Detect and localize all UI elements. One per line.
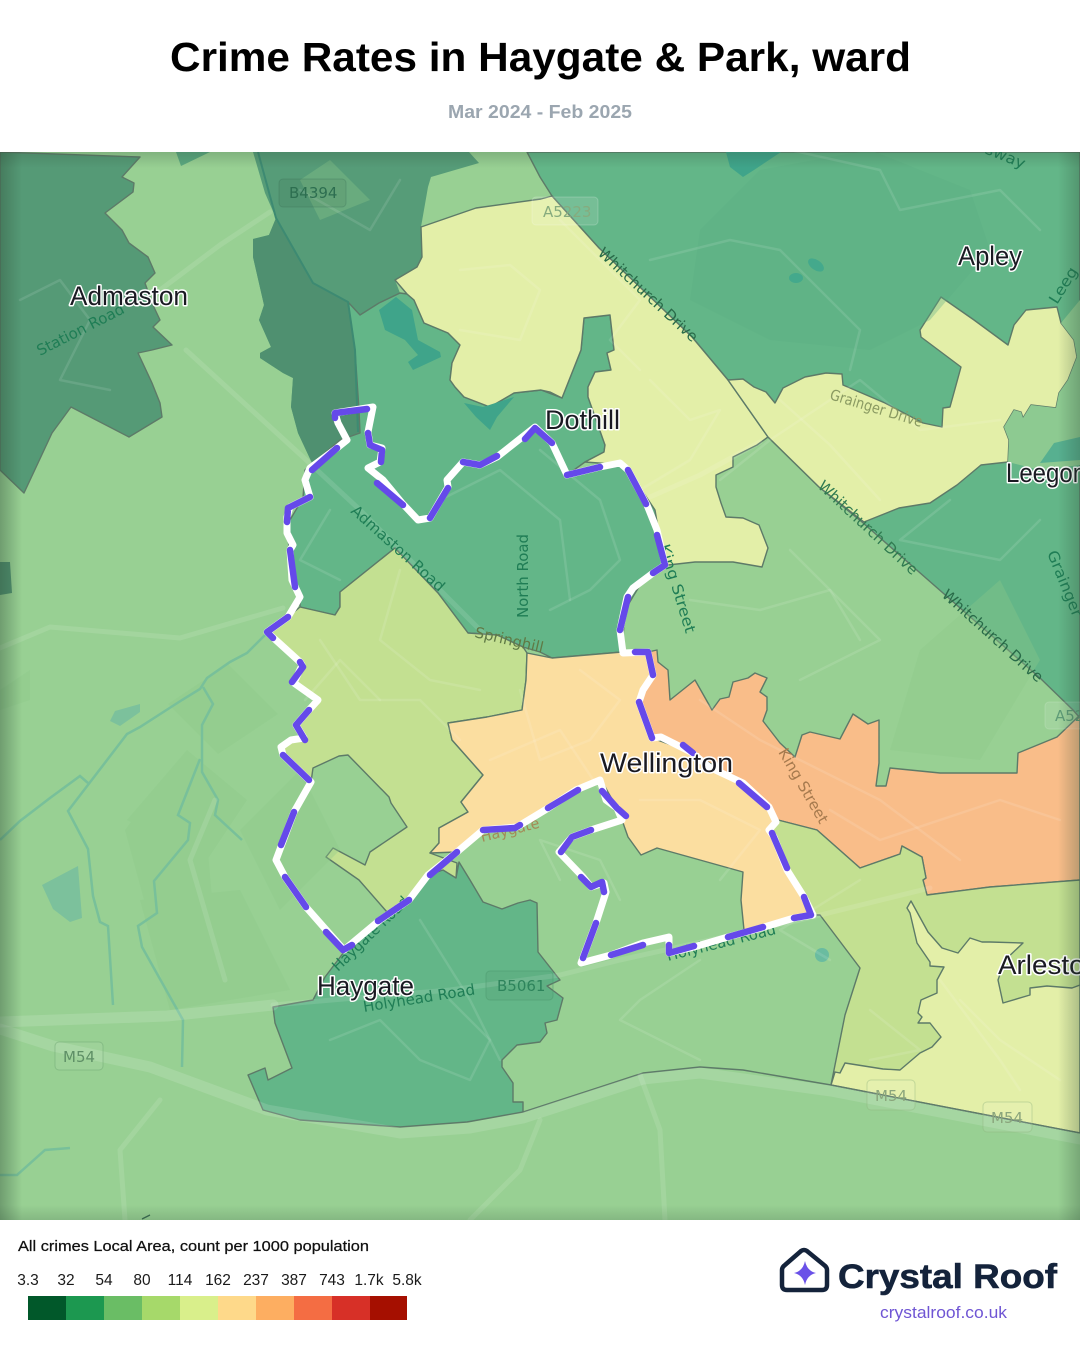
road labels: Haygate [479, 814, 541, 846]
road labels: Whitchurch Drive [938, 586, 1047, 686]
road shields: A5223 [543, 203, 591, 221]
road labels: Whitchurch Drive [814, 477, 922, 579]
road shields: M54 [875, 1087, 907, 1105]
logo: Crystal Roof house icon [782, 1250, 827, 1290]
legend scale labels: 237 [243, 1272, 269, 1289]
road labels: King Street [655, 542, 699, 635]
legend scale labels: 5.8k [392, 1272, 422, 1289]
road shields: B4394 [289, 184, 337, 202]
region: lime west of Wellington [267, 548, 527, 912]
region: dark woodland north [253, 152, 479, 463]
region: Leegomery east light green [1004, 300, 1080, 470]
legend title: All crimes Local Area, count per 1000 population [18, 1238, 369, 1255]
road labels: Leeg [1045, 264, 1080, 307]
region: Wellington east orange [639, 650, 1080, 895]
road labels [34, 140, 1080, 1016]
legend scale labels: 54 [95, 1272, 113, 1289]
place labels [70, 241, 1080, 1001]
region: Dothill mid green [287, 293, 665, 658]
M54 boundary line [523, 1067, 1080, 1133]
road labels: Whitchurch Drive [594, 244, 702, 346]
road shields: B5061 [497, 977, 545, 995]
water and terrain details [0, 150, 1080, 1219]
place labels: Apley [958, 241, 1022, 271]
region: Dothill north yellow-green [395, 196, 768, 567]
road shields [55, 179, 1080, 1132]
title: Crime Rates in Haygate & Park, ward [170, 34, 911, 80]
subtitle: date range: Mar 2024 - Feb 2025 [448, 102, 632, 122]
road labels: Holyhead Road [362, 980, 476, 1016]
region: Grainger yellow-green [728, 297, 1077, 522]
legend colour bar [28, 1296, 407, 1320]
legend scale labels: 114 [168, 1272, 193, 1289]
ward boundary: Haygate and Park [267, 407, 813, 963]
road labels: North Road [514, 534, 532, 618]
legend scale labels: 162 [205, 1272, 231, 1289]
road labels: Springhill [473, 623, 545, 657]
region: small dark patch left edge [0, 562, 12, 595]
road labels: Admaston Road [347, 502, 449, 595]
region: Arleston yellow-green [831, 901, 1080, 1133]
legend scale labels: 743 [319, 1272, 345, 1289]
legend scale labels: 3.3 [17, 1272, 39, 1289]
region: lime south east [769, 820, 1080, 1133]
road labels: Holyhead Road [665, 920, 778, 965]
road shields: M54 [63, 1048, 95, 1066]
legend scale labels: 387 [281, 1272, 307, 1289]
place labels: Haygate [317, 971, 414, 1001]
region: small dark patch top [176, 152, 210, 166]
region: Wellington town cream [430, 652, 813, 930]
road labels: Station Road [34, 300, 127, 360]
website url: crystalroof.co.uk [880, 1304, 1008, 1322]
region: Haygate south mid green [248, 862, 563, 1127]
region: darkest woodland strip [253, 218, 360, 463]
road labels: Grainger Drive [828, 386, 925, 431]
road shields: M54 [991, 1109, 1023, 1127]
map edge vignette [0, 152, 1080, 1220]
legend scale labels [17, 1272, 422, 1289]
region: Admaston dark green [0, 152, 172, 493]
choropleth map [0, 140, 1080, 1220]
legend scale labels: 32 [57, 1272, 75, 1289]
road network [0, 150, 1080, 1220]
road labels: King Street [775, 745, 832, 827]
legend scale labels: 80 [133, 1272, 151, 1289]
region: Apley and Leegomery high-green area [527, 152, 1080, 718]
road labels: Haygate Road [328, 892, 413, 975]
logo wordmark: Crystal Roof [838, 1258, 1058, 1296]
place labels: Dothill [545, 405, 620, 435]
legend scale labels: 1.7k [354, 1272, 384, 1289]
place labels: Wellington [600, 748, 733, 778]
place labels: Admaston [70, 281, 188, 311]
road labels: sway [983, 140, 1028, 172]
